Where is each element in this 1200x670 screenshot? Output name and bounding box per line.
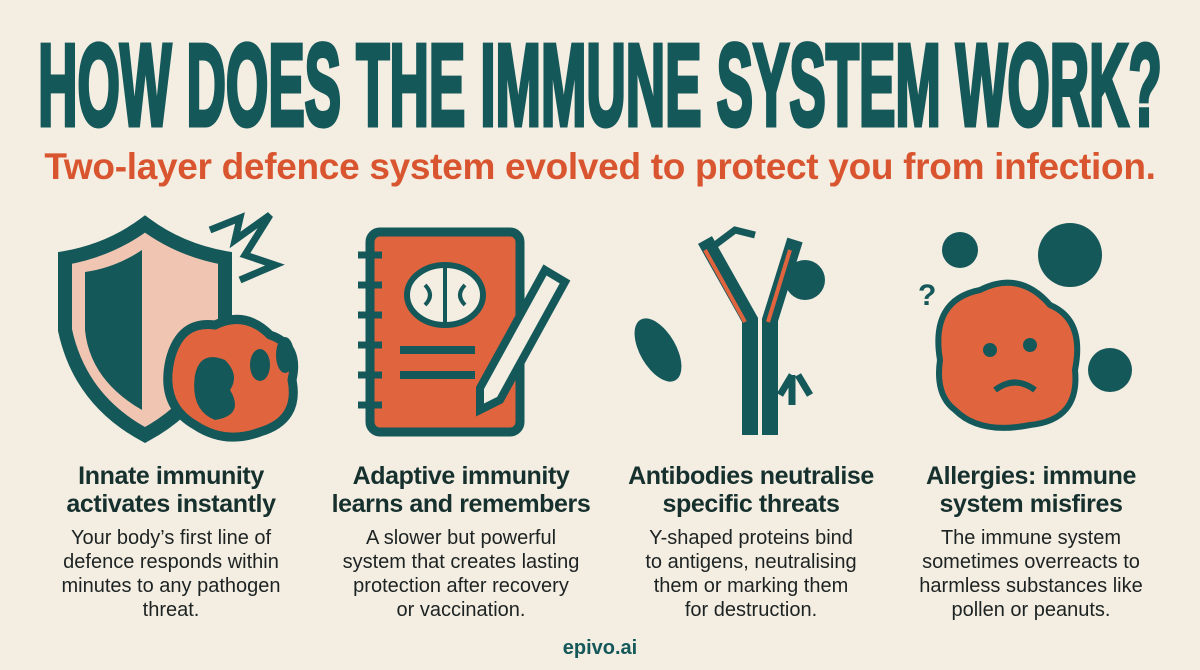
column 4 text: system misfires [939, 490, 1122, 518]
column 4 text: pollen or peanuts. [951, 599, 1110, 621]
title: HOW DOES THE IMMUNE SYSTEM WORK? [38, 20, 1162, 150]
column 2 text: learns and remembers [332, 490, 590, 518]
column 1 text: minutes to any pathogen [61, 575, 281, 597]
column 4 text: Allergies: immune [926, 462, 1136, 490]
icon: allergy cell [918, 223, 1132, 431]
column 2 text [332, 462, 590, 621]
column 4 text [919, 462, 1143, 621]
column 2 text: A slower but powerful [366, 527, 556, 549]
column 2 text: system that creates lasting [343, 551, 579, 573]
column 3 text: them or marking them [654, 575, 848, 597]
icon: antibody [634, 226, 825, 435]
column 3 text: Y-shaped proteins bind [649, 527, 853, 549]
column 3 text: for destruction. [685, 599, 817, 621]
column 4 text: harmless substances like [919, 575, 1143, 597]
icon: allergy cell: ? [918, 279, 936, 312]
column 3 text [628, 462, 874, 621]
column 3 text: to antigens, neutralising [645, 551, 857, 573]
column 1 text: Your body’s first line of [71, 527, 271, 549]
column 1 text: Innate immunity [78, 462, 264, 490]
column 1 text: activates instantly [66, 490, 276, 518]
column 2 text: protection after recovery [353, 575, 569, 597]
column 4 text: The immune system [941, 527, 1121, 549]
footer: epivo.ai [563, 637, 637, 659]
column 2 text: or vaccination. [397, 599, 525, 621]
column 2 text: Adaptive immunity [353, 462, 569, 490]
subtitle: Two-layer defence system evolved to protect you from infection. [44, 146, 1156, 187]
column 3 text: specific threats [662, 490, 840, 518]
icon: notebook with brain and pen [358, 228, 570, 436]
icon: shield and cell [58, 212, 298, 443]
column 4 text: sometimes overreacts to [922, 551, 1140, 573]
column 1 text: defence responds within [63, 551, 279, 573]
column 1 text: threat. [143, 599, 199, 621]
column 3 text: Antibodies neutralise [628, 462, 874, 490]
column 1 text [61, 462, 281, 621]
